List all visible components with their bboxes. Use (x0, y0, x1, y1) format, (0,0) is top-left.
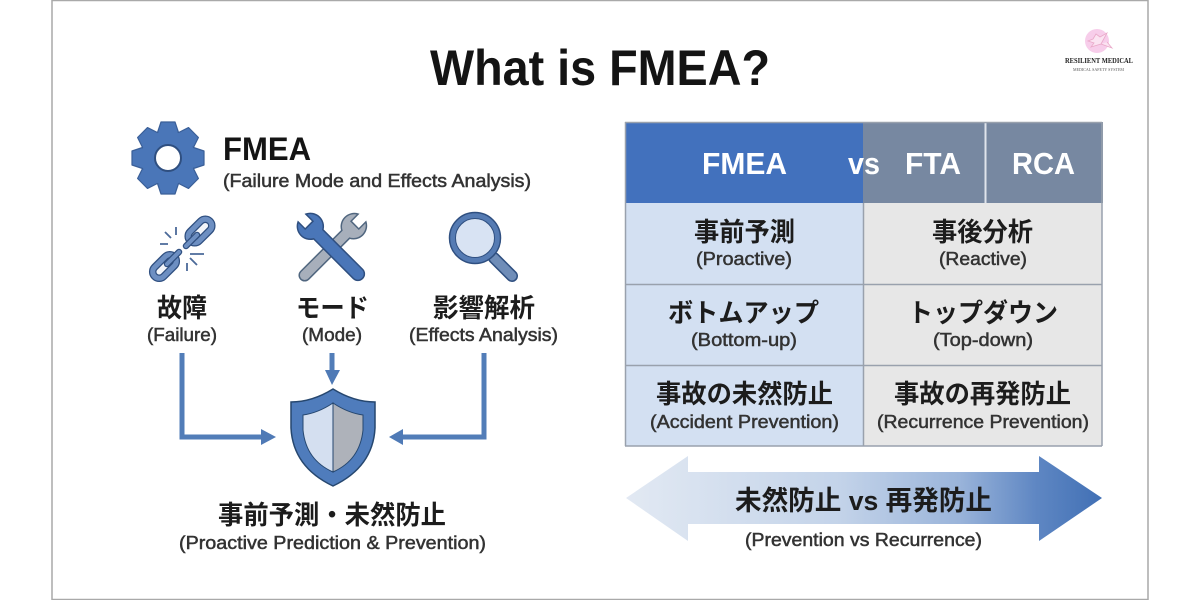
row 2 left (668, 298, 819, 350)
icon: shield (291, 389, 375, 486)
table header: vs (848, 146, 880, 181)
label: failure: 故障 (157, 293, 207, 323)
label: effects analysis: (Effects Analysis) (409, 325, 558, 345)
table header: FTA (905, 146, 961, 181)
row 2 left: (Bottom-up) (691, 330, 797, 350)
label: failure: (Failure) (147, 325, 217, 345)
comparison table (625, 122, 1103, 446)
logo: Resilient Medical (1065, 29, 1133, 72)
double arrow: prevention vs recurrence (626, 456, 1102, 541)
label: mode: モード (296, 293, 369, 323)
row 2 right: トップダウン (908, 298, 1058, 328)
arrow: mode to shield (325, 353, 340, 385)
logo: Resilient Medical: RESILIENT MEDICAL (1065, 57, 1133, 65)
label: effects analysis: 影響解析 (433, 293, 535, 323)
caption: proactive prediction and prevention (179, 500, 486, 553)
icon: crossed wrenches (292, 209, 372, 288)
row 1 left (694, 217, 795, 269)
table right column background (864, 203, 1102, 446)
icon: magnifying glass (450, 212, 512, 276)
row 1 right: (Reactive) (939, 249, 1027, 269)
label: failure (147, 293, 217, 345)
row 2 right (908, 298, 1058, 350)
subheading: full name: (Failure Mode and Effects Analysis) (223, 171, 531, 191)
row 3 right (877, 379, 1089, 432)
title: What is FMEA? (430, 40, 770, 96)
arrow: effects to shield (389, 353, 484, 445)
caption: proactive prediction and prevention: (Proactive Prediction & Prevention) (179, 533, 486, 553)
row 3 right: 事故の再発防止 (894, 379, 1071, 409)
row 2 left: ボトムアップ (668, 298, 819, 328)
row 1 right: 事後分析 (932, 217, 1033, 247)
table header (625, 122, 1103, 203)
row 3 left: (Accident Prevention) (650, 412, 839, 432)
row 1 right (932, 217, 1033, 269)
logo: Resilient Medical: MEDICAL SAFETY SYSTEM (1073, 67, 1124, 72)
caption: proactive prediction and prevention: 事前予測・未然防止 (218, 500, 446, 530)
row 3 left (650, 379, 839, 432)
row 3 right: (Recurrence Prevention) (877, 412, 1089, 432)
label: mode (296, 293, 369, 345)
row 2 right: (Top-down) (933, 330, 1033, 350)
row 1 left: (Proactive) (696, 249, 792, 269)
icon: gear (132, 122, 204, 194)
table left column background (626, 203, 864, 446)
arrow: failure to shield (182, 353, 276, 445)
label: mode: (Mode) (302, 325, 362, 345)
row 3 left: 事故の未然防止 (656, 379, 833, 409)
label: effects analysis (409, 293, 558, 345)
arrow label: 未然防止 vs 再発防止 (735, 486, 992, 516)
arrow caption: (Prevention vs Recurrence) (745, 530, 982, 550)
icon: broken chain (150, 217, 214, 281)
table header: FMEA (702, 146, 787, 181)
heading: FMEA: FMEA (223, 131, 311, 167)
table header: RCA (1012, 146, 1075, 181)
row 1 left: 事前予測 (694, 217, 795, 247)
